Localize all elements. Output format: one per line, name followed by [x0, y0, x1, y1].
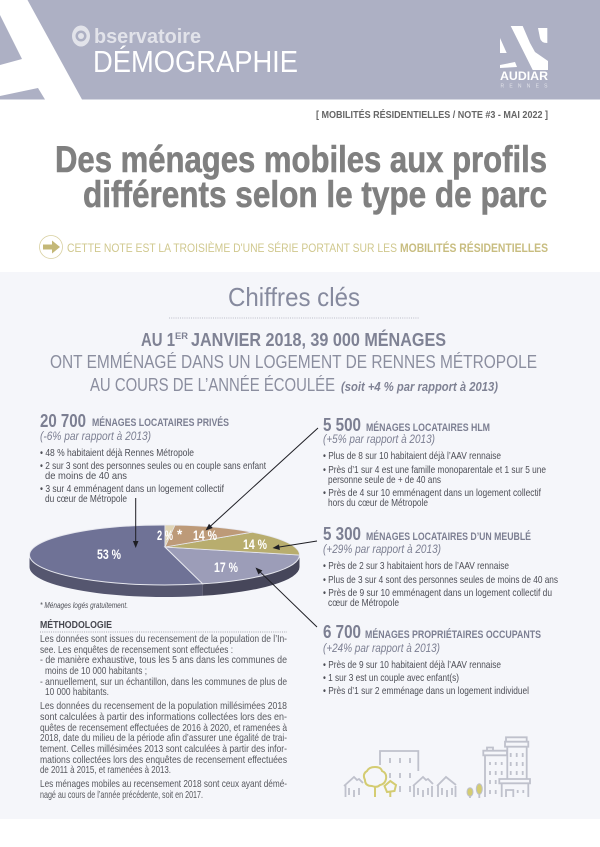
- block: methodology: - de manière exhaustive, tous les 5 ans dans les communes de: [40, 655, 287, 666]
- block: methodology: tement. Celles millésimées 2013 sont calculées à partir des infor-: [40, 744, 287, 755]
- block: furnished renters: [323, 524, 558, 609]
- block: owner occupiers: [323, 622, 541, 697]
- block: private renters: • 48 % habitaient déjà Rennes Métropole: [40, 448, 194, 459]
- block: methodology: 2018, date du milieu de la période afin d’assurer une égalité de trai-: [40, 733, 287, 744]
- key statement: [50, 329, 537, 395]
- icon: neighbourhood with houses and trees: [344, 751, 456, 797]
- block: HLM renters: (+5% par rapport à 2013): [323, 434, 435, 446]
- block: HLM renters: hors du cœur de Métropole: [328, 498, 428, 509]
- block: private renters: [40, 411, 266, 505]
- block: methodology: [40, 618, 287, 801]
- header banner: [0, 0, 600, 100]
- block: private renters: • 3 sur 4 emménagent dans un logement collectif: [40, 484, 224, 495]
- key statement: AU 1: [141, 330, 175, 350]
- block: furnished renters: • Près de 2 sur 3 habitaient hors de l’AAV rennaise: [323, 561, 509, 572]
- panel: key figures: [0, 272, 600, 819]
- block: methodology: de 2011 à 2015, et ramenées à 2013.: [40, 765, 171, 776]
- logo: AUDIAR Rennes: [500, 26, 549, 90]
- block: HLM renters: 5 500: [323, 415, 361, 435]
- block: furnished renters: • Près de 9 sur 10 emménagent dans un logement collectif du: [323, 588, 552, 599]
- block: methodology: MÉTHODOLOGIE: [40, 618, 112, 631]
- block: methodology: Les ménages mobiles au recensement 2018 sont ceux ayant démé-: [40, 779, 287, 790]
- block: methodology: quêtes de recensement effectuées de 2016 à 2020, et ramenées à: [40, 723, 287, 734]
- series label: Observatoire: bservatoire: [94, 26, 201, 48]
- illustration: houses, trees and towers: [344, 737, 530, 798]
- note reference line: [ MOBILITÉS RÉSIDENTIELLES / NOTE #3 - MAI 2022 ]: [316, 108, 548, 121]
- block: owner occupiers: 6 700: [323, 622, 361, 642]
- key statement: (soit +4 % par rapport à 2013): [341, 380, 498, 394]
- block: owner occupiers: MÉNAGES PROPRIÉTAIRES OCCUPANTS: [365, 628, 541, 641]
- pie labels: [97, 527, 267, 575]
- pie chart: [29, 525, 300, 597]
- block: HLM renters: • Près d’1 sur 4 est une famille monoparentale et 1 sur 5 une: [323, 465, 546, 476]
- block: HLM renters: • Plus de 8 sur 10 habitaient déjà l’AAV rennaise: [323, 451, 501, 462]
- arrows to pie slices: [133, 428, 318, 627]
- icon: large white A shape: [0, 0, 82, 100]
- footnote: * Ménages logés gratuitement.: [40, 601, 128, 610]
- intro line with arrow: [40, 236, 548, 258]
- pie labels: 17 %: [214, 560, 238, 575]
- logo: AUDIAR Rennes: AUDIAR: [500, 71, 549, 83]
- slice: 14 percent gold: [165, 532, 300, 555]
- pie labels: 2 %: [157, 528, 173, 543]
- logo: AUDIAR Rennes: RENNES: [500, 84, 548, 90]
- block: private renters: • 2 sur 3 sont des personnes seules ou en couple sans enfant: [40, 461, 266, 472]
- block: furnished renters: MÉNAGES LOCATAIRES D’UN MEUBLÉ: [366, 530, 531, 543]
- key statement: ER: [175, 331, 189, 341]
- block: private renters: 20 700: [40, 411, 86, 431]
- key statement: AU COURS DE L’ANNÉE ÉCOULÉE: [90, 375, 335, 395]
- block: methodology: - annuellement, sur un échantillon, dans les communes de plus de: [40, 677, 287, 688]
- block: private renters: de moins de 40 ans: [45, 471, 127, 482]
- block: methodology: see. Les enquêtes de recensement sont effectuées :: [40, 645, 233, 656]
- block: methodology: Les données du recensement de la population millésimées 2018: [40, 701, 287, 712]
- pie labels: 53 %: [97, 547, 121, 562]
- heading: Chiffres clés: Chiffres clés: [228, 282, 360, 312]
- slice: 2 percent: [165, 525, 175, 547]
- block: owner occupiers: (+24% par rapport à 2013): [323, 643, 440, 655]
- heading: DÉMOGRAPHIE: DÉMOGRAPHIE: [93, 44, 298, 79]
- block: private renters: MÉNAGES LOCATAIRES PRIVÉS: [92, 416, 229, 429]
- block: HLM renters: MÉNAGES LOCATAIRES HLM: [366, 421, 490, 434]
- block: HLM renters: • Près de 4 sur 10 emménagent dans un logement collectif: [323, 488, 541, 499]
- block: furnished renters: 5 300: [323, 524, 361, 544]
- block: private renters: (-6% par rapport à 2013): [40, 431, 151, 443]
- block: furnished renters: cœur de Métropole: [328, 598, 399, 609]
- intro line with arrow: MOBILITÉS RÉSIDENTIELLES: [400, 242, 548, 255]
- main title: [55, 139, 547, 215]
- intro line with arrow: CETTE NOTE EST LA TROISIÈME D'UNE SÉRIE PORTANT SUR LES: [67, 242, 397, 255]
- block: methodology: nagé au cours de l’année précédente, soit en 2017.: [40, 790, 203, 801]
- block: methodology: sont calculées à partir des informations collectées lors des en-: [40, 712, 287, 723]
- block: owner occupiers: • Près de 9 sur 10 habitaient déjà l’AAV rennaise: [323, 660, 501, 671]
- slice: 14 percent brown: [165, 525, 252, 547]
- slice: 53 percent: [29, 525, 203, 585]
- icon: towers with small trees: [467, 737, 530, 798]
- pie labels: 14 %: [243, 537, 267, 552]
- block: furnished renters: (+29% par rapport à 2013): [323, 544, 441, 556]
- pie labels: *: [177, 527, 183, 542]
- pie side wall: [29, 555, 300, 597]
- block: methodology: Les données sont issues du recensement de la population de l’In-: [40, 634, 287, 645]
- pie labels: 14 %: [193, 528, 217, 543]
- block: methodology: 10 000 habitants.: [45, 687, 109, 698]
- block: HLM renters: personne seule de + de 40 ans: [328, 475, 441, 486]
- block: methodology: mations collectées lors des enquêtes de recensement effectuées: [40, 755, 287, 766]
- block: methodology: moins de 10 000 habitants ;: [45, 666, 147, 677]
- icon: arrow in circle: [40, 236, 62, 258]
- block: private renters: du cœur de Métropole: [45, 494, 127, 505]
- block: owner occupiers: • Près d’1 sur 2 emménage dans un logement individuel: [323, 686, 529, 697]
- block: HLM renters: [323, 415, 546, 509]
- key statement: JANVIER 2018, 39 000 MÉNAGES: [191, 329, 446, 350]
- slice: 17 percent: [165, 547, 300, 584]
- block: owner occupiers: • 1 sur 3 est un couple avec enfant(s): [323, 673, 459, 684]
